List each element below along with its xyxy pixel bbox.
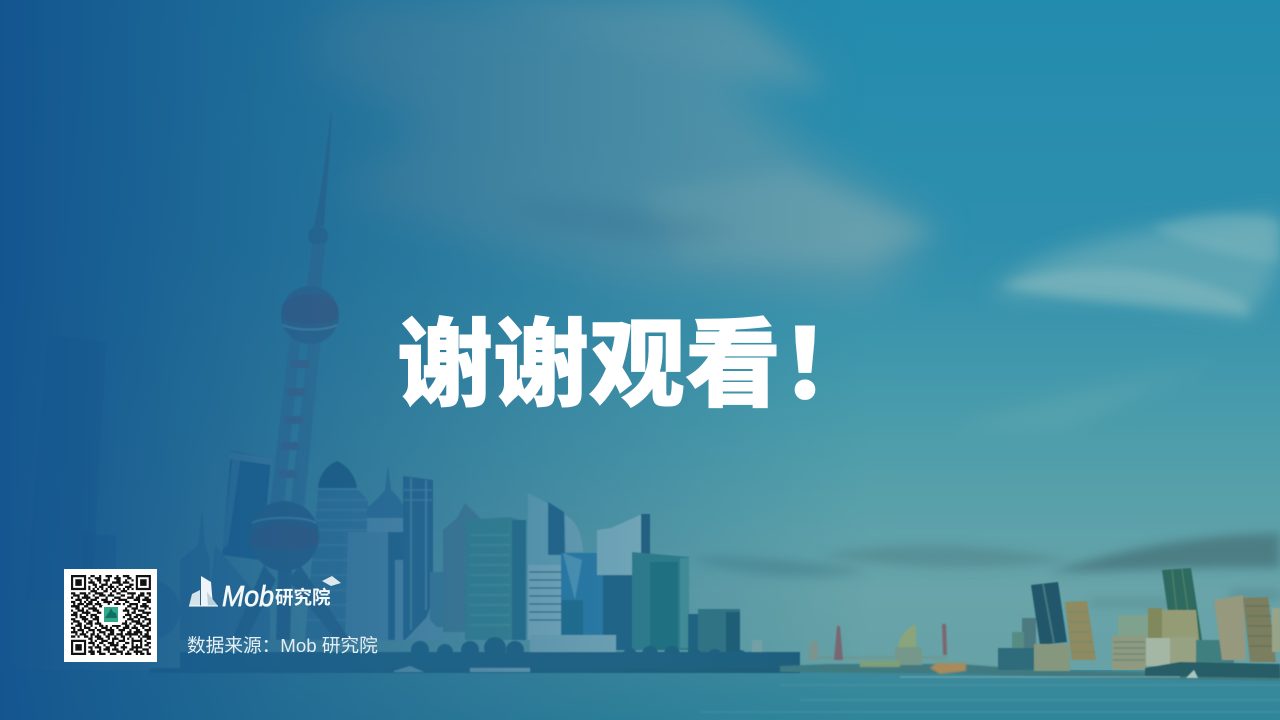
Oriental Pearl Tower [232, 112, 350, 640]
trees and shore [180, 637, 800, 672]
orange tower [1065, 601, 1096, 660]
boats [394, 666, 530, 672]
legs [232, 565, 350, 640]
logo: Mob research institute [189, 576, 341, 613]
logo icon: graduation cap [322, 576, 341, 586]
QR centre logo [102, 605, 122, 625]
ghost towers [25, 335, 210, 640]
water [0, 670, 1280, 720]
mid buildings [430, 503, 526, 640]
skyline: right cluster [900, 568, 1280, 678]
small sphere and shaft [307, 226, 328, 288]
skyline: far left bridge and sails [780, 624, 1280, 681]
title: 谢谢观看！ [397, 312, 877, 419]
dark tower and triangular wing [205, 451, 271, 640]
upper sphere [281, 286, 339, 344]
source note: 数据来源：Mob 研究院 [187, 635, 378, 656]
trees [1145, 662, 1280, 678]
logo wordmark: Mob [222, 581, 274, 613]
lower sphere [249, 501, 319, 571]
glass towers [528, 493, 603, 640]
dark tower [1031, 582, 1067, 645]
tall green tower [1162, 568, 1202, 640]
spire [314, 112, 332, 226]
far right towers [1214, 595, 1246, 660]
logo icon: building [189, 576, 218, 606]
columns [270, 335, 321, 510]
white building with lantern [345, 465, 405, 640]
domed building [305, 461, 368, 640]
column pods [279, 360, 309, 478]
shoreline [780, 664, 1280, 681]
clouds [300, 0, 1280, 606]
logo: Mob research institute: 研究院 [275, 587, 331, 608]
skyline: left cluster [25, 335, 800, 673]
right of cluster [405, 514, 762, 656]
striped tower [403, 476, 433, 640]
